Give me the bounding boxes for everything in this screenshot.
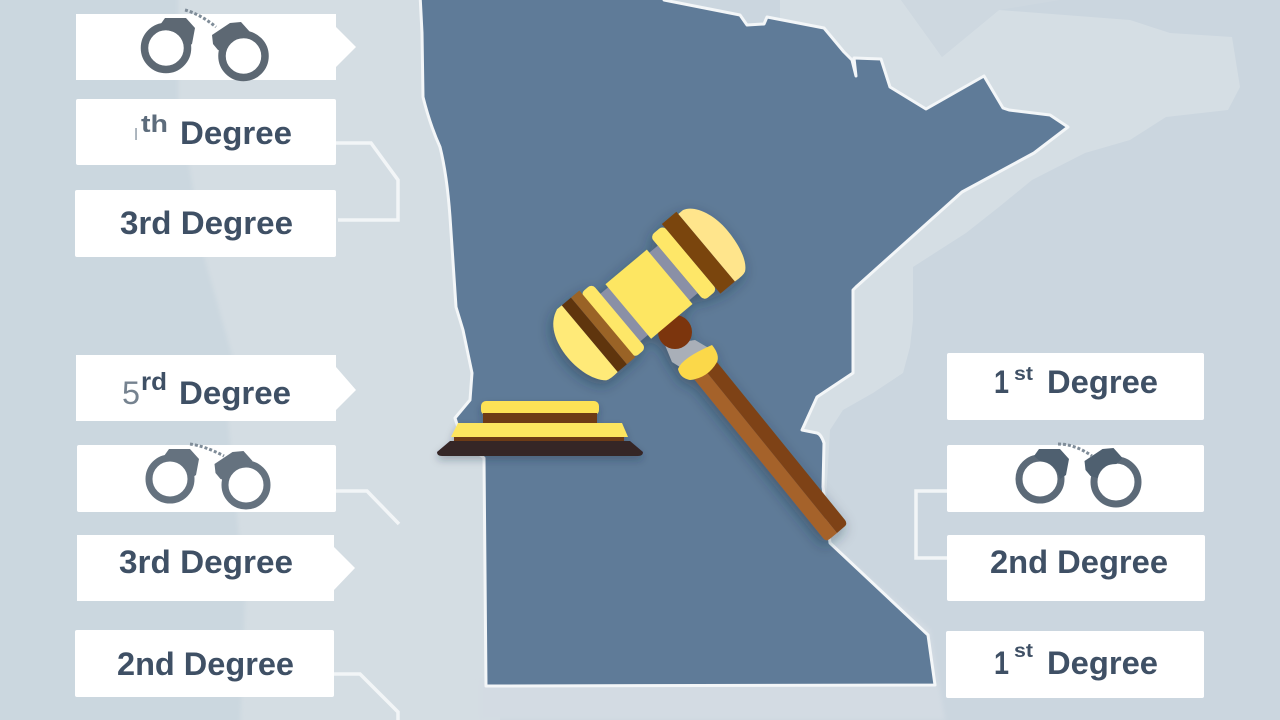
panel: 2nd degree right: 2nd Degree <box>990 544 1168 580</box>
panel: 4th degree <box>76 99 336 165</box>
gavel peg <box>658 315 692 349</box>
panel: 4th degree: ı <box>133 120 139 145</box>
connector: right handcuffs to 2nd degree <box>916 491 947 558</box>
panel: handcuffs box right <box>947 444 1204 512</box>
panel: 4th degree: th <box>141 111 168 138</box>
panel: 3rd degree lower: 3rd Degree <box>119 544 293 580</box>
sound block <box>437 401 643 456</box>
panel: 2nd degree left <box>75 630 334 697</box>
panel: 3rd degree upper: 3rd Degree <box>120 205 293 241</box>
connector: 2nd degree to map <box>334 674 398 720</box>
panel: 1st degree lower right <box>946 631 1204 698</box>
map of Minnesota <box>420 0 1068 686</box>
panel: 1st degree upper right: Degree <box>1047 364 1158 400</box>
panel: 5th row degree: 5 <box>122 375 140 411</box>
panel: 1st degree lower right: Degree <box>1047 645 1158 681</box>
panel: handcuffs box top left <box>76 10 356 80</box>
connector: 4th to 3rd degree <box>336 143 398 220</box>
icon: handcuffs <box>149 444 267 506</box>
gavel handle <box>694 361 846 540</box>
panel: 2nd degree right <box>947 535 1205 601</box>
panel: 5th row degree: rd <box>141 368 167 396</box>
panel: 5th row degree: Degree <box>179 375 291 411</box>
panel: 1st degree upper right <box>947 353 1204 420</box>
panel: 1st degree upper right: st <box>1014 364 1034 385</box>
connector: handcuffs to map <box>336 491 399 524</box>
panel: 5th row degree <box>76 355 356 421</box>
panel: 1st degree lower right: st <box>1014 641 1034 662</box>
panel: 1st degree lower right: 1 <box>994 645 1009 681</box>
panel: handcuffs box lower left <box>77 444 336 512</box>
gavel head <box>540 193 756 395</box>
panel: 1st degree upper right: 1 <box>994 364 1009 400</box>
panel: 3rd degree lower <box>77 535 355 601</box>
icon: handcuffs <box>1019 444 1138 504</box>
panel: 4th degree: Degree <box>180 115 292 151</box>
panel: 2nd degree left: 2nd Degree <box>117 646 294 682</box>
icon: handcuffs <box>144 10 265 78</box>
gavel collar <box>678 345 718 380</box>
icon: gavel <box>540 193 846 540</box>
gavel neck <box>665 340 712 372</box>
panel: 3rd degree upper <box>75 190 336 257</box>
